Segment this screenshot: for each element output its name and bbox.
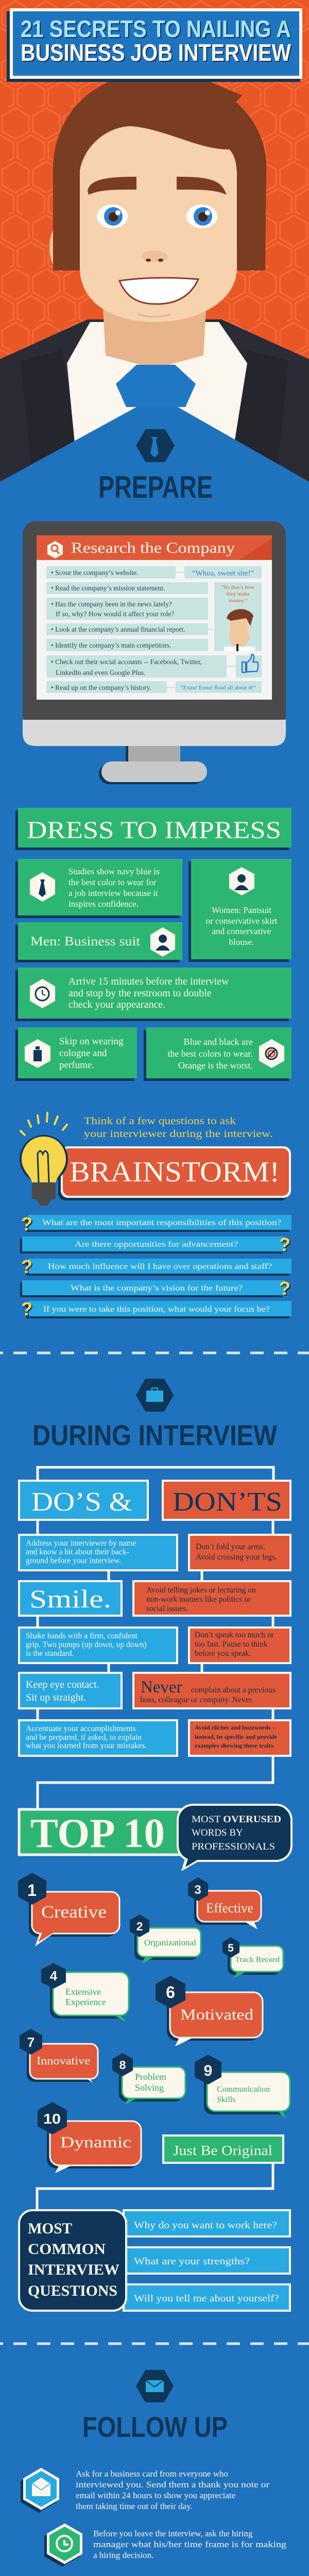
- text: navy blue: the best color to wear for: [68, 877, 157, 887]
- text: cologne: Skip on wearing: [59, 1036, 124, 1047]
- text: best colors: the best colors to wear.: [168, 1048, 253, 1059]
- panel: research the company monitor: • Check out their social accounts -- Facebook, Twitter,: [51, 658, 202, 666]
- icon: envelope hexagon: [136, 2370, 174, 2402]
- panel: research the company monitor: • Identify the company’s main competitors.: [51, 641, 171, 649]
- list: brainstorm questions: [20, 1213, 291, 1320]
- panel: research the company monitor: • Has the company been in the news lately?: [51, 600, 172, 608]
- word 4: extensive experience: [41, 1963, 129, 2022]
- panel: do's and don'ts: before you speak.: [195, 1649, 251, 1658]
- panel: do's and don'ts: Keep eye contact.: [26, 1679, 99, 1690]
- step 2: ask time frame: manager what his/her time frame is for making: [93, 2539, 287, 2549]
- word 8: problem solving: Solving: [135, 2082, 164, 2093]
- word 9: communication skills: 9: [204, 2062, 212, 2079]
- word 6: motivated: [156, 1976, 263, 2046]
- word 8: problem solving: Problem: [135, 2072, 166, 2082]
- background: orange top: [0, 0, 309, 495]
- panel: do's and don'ts: Don’t speak too much or: [195, 1631, 274, 1639]
- panel: do's and don'ts: complain about a previous: [191, 1686, 276, 1694]
- panel: do's and don'ts: Never: [141, 1678, 182, 1697]
- panel: do's and don'ts: instead, be specific and provide: [195, 1733, 278, 1740]
- text: women: blouse.: [229, 937, 254, 947]
- list: brainstorm questions: ?: [22, 1299, 33, 1320]
- step 1: thank you note: Ask for a business card from everyone who: [76, 2469, 228, 2479]
- panel: do's and don'ts: Shake hands with a firm, confident: [26, 1632, 138, 1640]
- panel: most common interview questions: INTERVIEW: [28, 2261, 119, 2278]
- panel: research the company monitor: “Whoa, sweet site!”: [192, 569, 254, 578]
- text: brainstorm intro: Think of a few questions to ask: [84, 1115, 236, 1127]
- callout: most overused words: MOST OVERUSED: [192, 1814, 281, 1825]
- panel: research the company monitor: If so, why? How would it affect your role?: [56, 610, 174, 618]
- panel: follow up steps: [21, 2468, 287, 2576]
- text: women: or conservative skirt: [206, 916, 278, 926]
- panel: do's and don'ts: Smile.: [29, 1584, 111, 1613]
- panel: research the company monitor: • Read up on the company’s history.: [51, 684, 151, 691]
- text: brainstorm intro: your interviewer during the interview.: [84, 1128, 273, 1140]
- panel: most common interview questions: MOST: [28, 2220, 72, 2237]
- panel: do's and don'ts: ground before your interview.: [26, 1556, 121, 1565]
- callout: most overused words: [178, 1805, 291, 1871]
- panel: most common interview questions: [19, 2210, 290, 2311]
- panel: do's and don'ts: social issues.: [146, 1604, 188, 1613]
- panel: research the company monitor: money.”: [229, 598, 248, 604]
- word 7: innovative: Innovative: [37, 2054, 90, 2067]
- text: brainstorm intro: [84, 1115, 273, 1140]
- step 2: ask time frame: [44, 2523, 287, 2567]
- word 3: effective: Effective: [206, 1901, 253, 1916]
- text: cologne: cologne and: [59, 1048, 107, 1059]
- panel: research the company monitor: “So that’s how: [221, 584, 254, 590]
- text: men: Men: Business suit: [30, 935, 140, 948]
- panel: research the company monitor: LinkedIn and even Google Plus.: [56, 669, 145, 676]
- panel: do's and don'ts: grip. Two pumps (up down, up down): [26, 1640, 147, 1649]
- list: brainstorm questions: ?: [22, 1214, 33, 1235]
- text: best colors: Orange is the worst.: [178, 1060, 253, 1071]
- panel: do's and don'ts: Avoid telling jokes or lecturing on: [146, 1586, 256, 1595]
- icon: cartoon man: [224, 609, 255, 651]
- step 1: thank you note: them taking time out of their day.: [76, 2501, 193, 2511]
- text: men: [30, 927, 175, 957]
- step 2: ask time frame: Before you leave the interview, ask the hiring: [93, 2529, 253, 2538]
- word 4: extensive experience: Experience: [65, 1997, 106, 2007]
- text: cologne: perfume.: [59, 1060, 94, 1071]
- text: navy blue: a job interview because it: [68, 888, 158, 898]
- title banner: [7, 8, 302, 82]
- heading: prepare: PREPARE: [98, 470, 213, 504]
- word 7: innovative: [20, 2029, 98, 2082]
- word 2: organizational: Organizational: [144, 1938, 196, 1947]
- word 4: extensive experience: 4: [50, 1968, 58, 1984]
- word 5: track record: [222, 1937, 283, 1978]
- text: arrive early: and stop by the restroom to double: [68, 988, 212, 999]
- list: brainstorm questions: If you were to take this position, what would your focus be?: [43, 1305, 270, 1314]
- text: best colors: [168, 1037, 284, 1071]
- panel: do's and don'ts: Address your interviewer by name: [26, 1539, 136, 1548]
- panel: top 10 overused words: [18, 1805, 291, 2173]
- panel: research the company monitor: “Extra! Extra! Read all about it!”: [181, 685, 256, 691]
- panel: research the company monitor: • Look at the company’s annual financial report.: [51, 625, 185, 633]
- panel: do's and don'ts: boss, colleague or company. Never.: [140, 1696, 253, 1704]
- word 10: dynamic: Dynamic: [60, 2133, 131, 2151]
- text: navy blue: [30, 867, 160, 909]
- list: brainstorm questions: ?: [21, 1256, 32, 1277]
- word 7: innovative: 7: [27, 2035, 35, 2050]
- panel: do's and don'ts: too fast. Pause to think: [195, 1640, 268, 1649]
- panel: research the company monitor: • Read the company’s mission statement.: [51, 584, 165, 592]
- callout: most overused words: PROFESSIONALS: [192, 1841, 275, 1852]
- word 10: dynamic: 10: [43, 2111, 61, 2127]
- callout: just be original: [163, 2136, 283, 2163]
- list: brainstorm questions: ?: [280, 1235, 291, 1256]
- word 9: communication skills: [195, 2055, 290, 2119]
- icon: thumbs up: [242, 654, 258, 672]
- word 6: motivated: 6: [166, 1983, 175, 2002]
- heading: follow up: FOLLOW UP: [82, 2411, 228, 2443]
- panel: do's and don'ts: and be prepared, if asked, to explain: [26, 1733, 142, 1742]
- word 5: track record: Track Record: [235, 1956, 280, 1964]
- panel: do's and don'ts: Don’t fold your arms.: [196, 1543, 265, 1551]
- step 1: thank you note: email within 24 hours to show you appreciate: [76, 2490, 235, 2500]
- text: cologne: [25, 1036, 124, 1071]
- word 8: problem solving: 8: [119, 2058, 126, 2072]
- word 3: effective: 3: [194, 1883, 201, 1897]
- heading: don'ts: DON’TS: [173, 1487, 282, 1517]
- list: brainstorm questions: ?: [279, 1278, 290, 1299]
- word 6: motivated: Motivated: [180, 2006, 253, 2023]
- list: brainstorm questions: How much influence will I have over operations and staff?: [48, 1262, 272, 1271]
- panel: do's and don'ts: examples showing those traits.: [195, 1742, 274, 1749]
- text: best colors: Blue and black are: [184, 1037, 253, 1047]
- panel: research the company monitor: they make: [226, 591, 250, 597]
- panel: do's and don'ts: [19, 1467, 290, 1808]
- text: women: and conservative: [212, 926, 271, 936]
- panel: research the company monitor: • Scour the company’s website.: [51, 569, 138, 577]
- word 1: creative: 1: [27, 1881, 37, 1900]
- panel: brainstorm: [20, 1113, 291, 1320]
- step 1: thank you note: interviewed you. Send them a thank you note or: [76, 2480, 269, 2489]
- word 8: problem solving: [112, 2053, 185, 2105]
- word 3: effective: [188, 1877, 261, 1929]
- panel: most common interview questions: Will you tell me about yourself?: [134, 2293, 279, 2304]
- panel: research the company monitor: [23, 521, 286, 784]
- banner: brainstorm: [58, 1146, 291, 1200]
- heading: top 10: TOP 10: [30, 1811, 165, 1856]
- text: arrive early: Arrive 15 minutes before the interview: [68, 976, 229, 987]
- text: navy blue: inspires confidence.: [68, 899, 139, 909]
- panel: do's and don'ts: Avoid crossing your legs.: [196, 1553, 277, 1562]
- text: arrive early: [30, 976, 229, 1010]
- panel: most common interview questions: COMMON: [28, 2241, 106, 2258]
- list: brainstorm questions: ?: [21, 1298, 32, 1319]
- panel: do's and don'ts: Avoid clichés and buzzwords –: [195, 1724, 276, 1731]
- word 5: track record: 5: [228, 1942, 234, 1954]
- word 1: creative: [18, 1873, 119, 1946]
- callout: most overused words: WORDS BY: [192, 1827, 243, 1838]
- text: navy blue: Studies show navy blue is: [68, 867, 160, 876]
- header: research the company: Research the Company: [71, 539, 235, 556]
- heading: dress to impress: [15, 808, 291, 850]
- panel: do's and don'ts: what you learned from your mistakes.: [26, 1741, 147, 1750]
- icon: light bulb: [20, 1113, 68, 1206]
- panel: do's and don'ts: and know a bit about their back-: [26, 1548, 129, 1556]
- heading: do's: DO’S &: [31, 1487, 132, 1517]
- panel: dress to impress: [15, 808, 291, 1081]
- text: women: Women: Pantsuit: [212, 905, 271, 915]
- word 9: communication skills: Skills: [217, 2095, 235, 2104]
- panel: do's and don'ts: Accentuate your accomplishments: [26, 1724, 135, 1733]
- word 1: creative: Creative: [41, 1903, 107, 1922]
- heading: dress to impress: DRESS TO IMPRESS: [27, 817, 281, 844]
- panel: do's and don'ts: is the standard.: [26, 1649, 74, 1658]
- word 2: organizational: [130, 1914, 201, 1964]
- callout: just be original: Just Be Original: [173, 2143, 272, 2158]
- panel: do's and don'ts: Sit up straight.: [26, 1692, 86, 1703]
- list: brainstorm questions: ?: [21, 1213, 32, 1234]
- text: women: [206, 867, 278, 947]
- list: brainstorm questions: ?: [279, 1234, 290, 1255]
- list: brainstorm questions: What is the company’s vision for the future?: [71, 1284, 243, 1293]
- text: arrive early: check your appearance.: [68, 999, 165, 1010]
- icon: tie hexagon: [136, 429, 175, 462]
- word 2: organizational: 2: [136, 1920, 143, 1933]
- heading: during interview: DURING INTERVIEW: [32, 1419, 277, 1451]
- list: brainstorm questions: What are the most important responsibilities of this position?: [42, 1218, 281, 1227]
- word 9: communication skills: Communication: [217, 2085, 270, 2094]
- panel: most common interview questions: Why do you want to work here?: [134, 2220, 277, 2231]
- step 2: ask time frame: a hiring decision.: [93, 2550, 154, 2560]
- panel: most common interview questions: QUESTIONS: [28, 2282, 117, 2299]
- list: brainstorm questions: ?: [22, 1257, 33, 1278]
- word 4: extensive experience: Extensive: [65, 1987, 101, 1997]
- word 10: dynamic: [38, 2102, 141, 2173]
- panel: most common interview questions: What are your strengths?: [134, 2256, 250, 2267]
- icon: briefcase hexagon: [136, 1379, 174, 1412]
- list: brainstorm questions: Are there opportunities for advancement?: [75, 1240, 238, 1249]
- list: brainstorm questions: ?: [280, 1279, 291, 1300]
- header: research the company: [37, 535, 272, 560]
- step 1: thank you note: [21, 2468, 269, 2513]
- illustration: businessman: [0, 69, 309, 495]
- panel: do's and don'ts: non-work matters like politics or: [146, 1595, 251, 1604]
- banner: brainstorm: BRAINSTORM!: [70, 1156, 280, 1188]
